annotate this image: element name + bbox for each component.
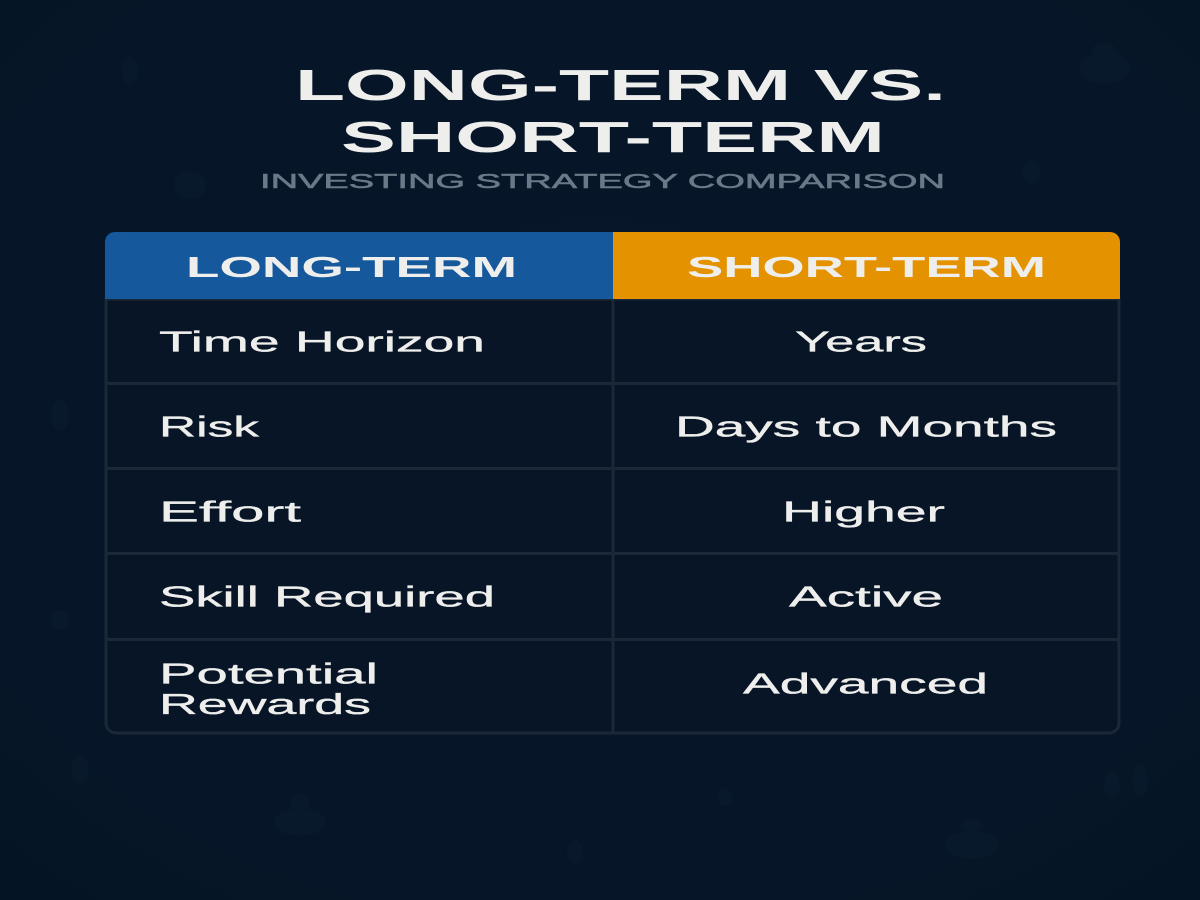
table body grid [106,299,1119,733]
row labels: Rewards [159,689,371,721]
title: LONG-TERM VS. [295,61,946,110]
row values: Years [795,326,927,358]
title: SHORT-TERM [341,113,885,162]
row values: Advanced [743,668,988,700]
comparison table [105,232,1120,733]
row labels: Effort [159,496,301,528]
header: long-term: LONG-TERM [186,252,517,284]
header: short-term [613,232,1120,299]
row values: Active [789,582,943,614]
row labels: Time Horizon [159,326,485,358]
row labels: Potential [159,658,378,690]
row values: Days to Months [675,412,1057,444]
row values: Higher [782,496,946,528]
header: long-term [105,232,613,299]
row labels: Skill Required [159,582,495,614]
row values [675,326,1057,700]
header: short-term: SHORT-TERM [687,252,1046,284]
title [295,61,946,162]
row labels [159,326,495,721]
subtitle: INVESTING STRATEGY COMPARISON [260,171,945,193]
row labels: Risk [159,412,260,444]
